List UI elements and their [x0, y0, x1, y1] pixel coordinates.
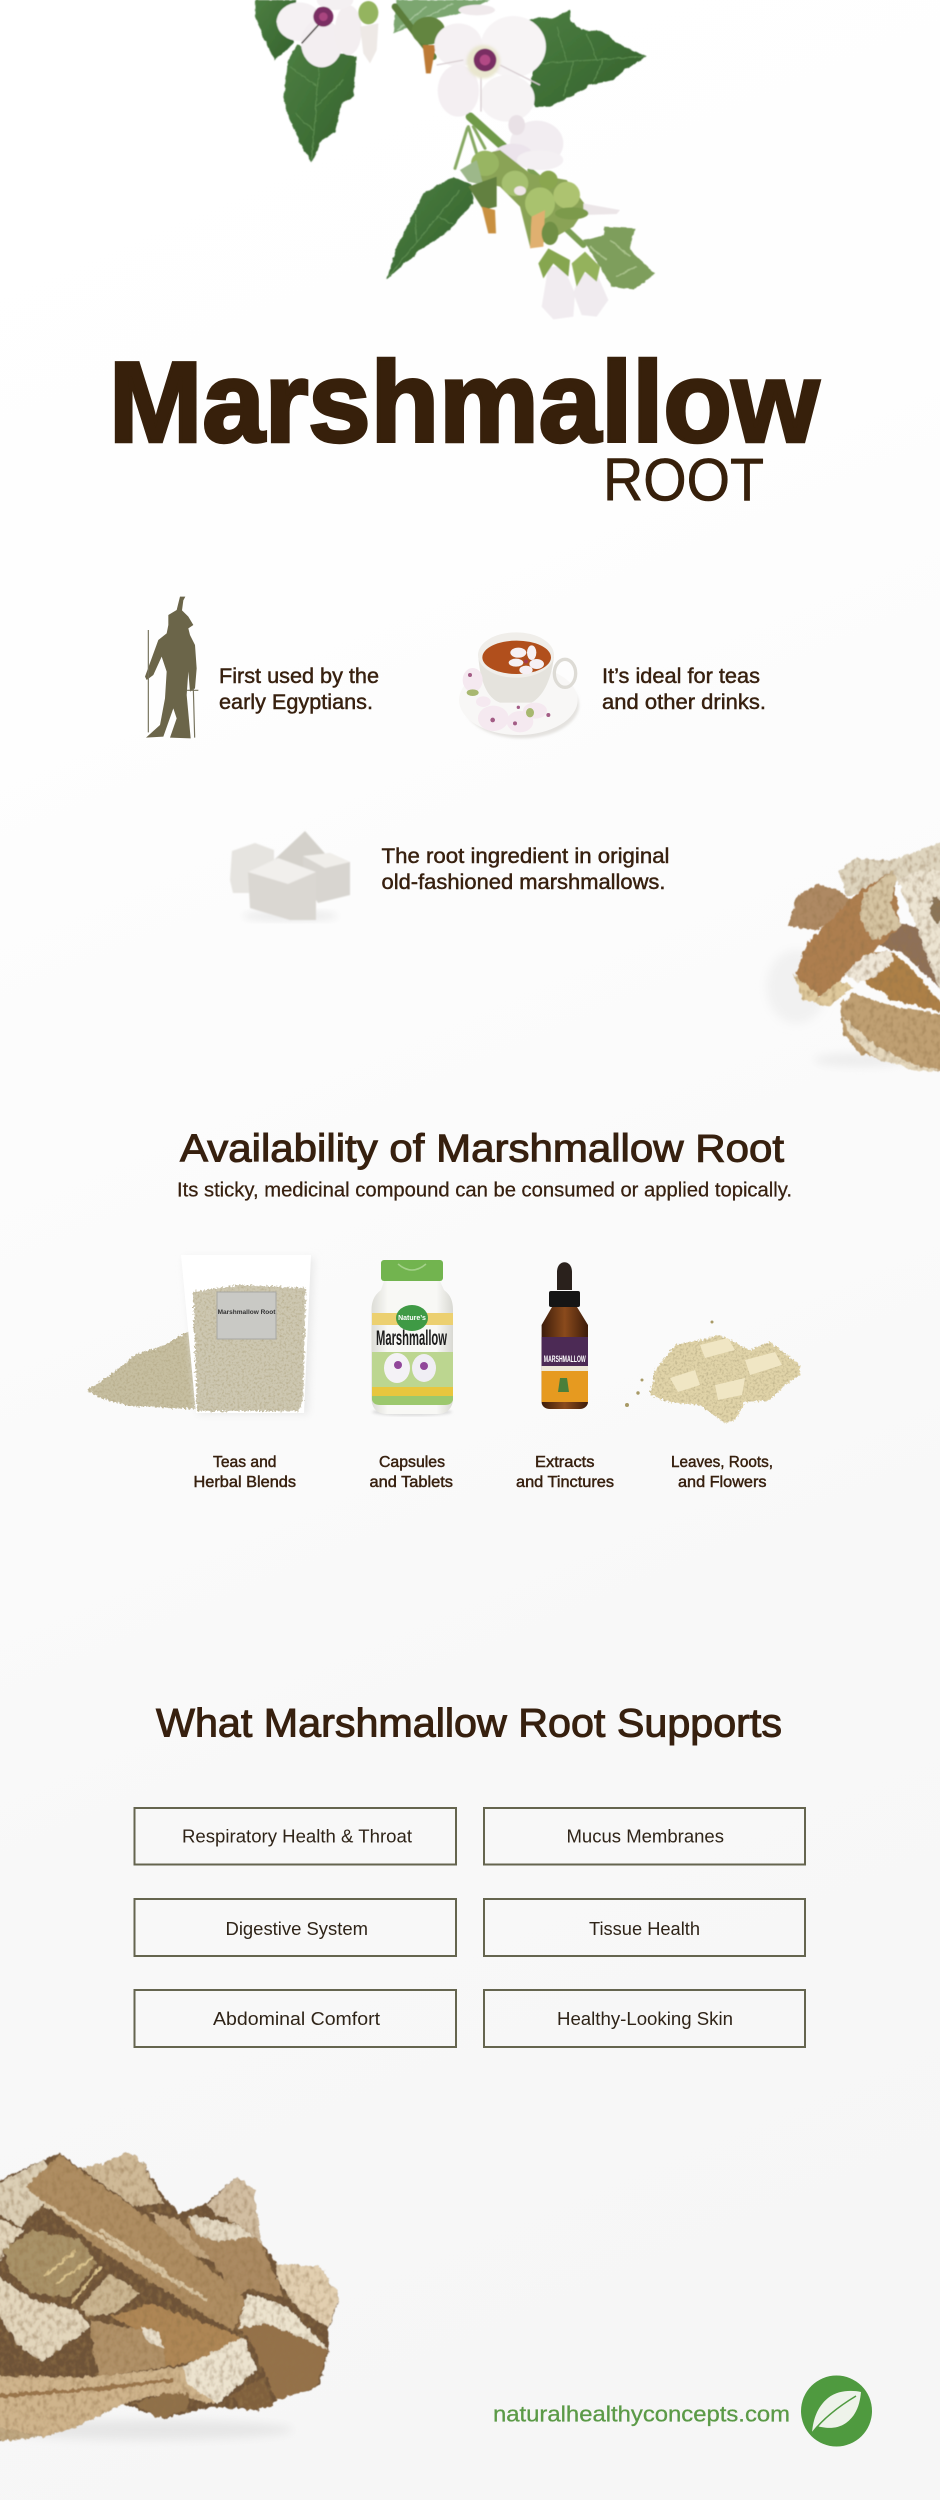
caption: extracts: and Tinctures — [516, 1474, 614, 1491]
text: first used: First used by the — [219, 665, 379, 688]
icon: green leaf logo — [801, 2376, 872, 2446]
illustration: dried root pile right — [767, 842, 940, 1072]
caption: extracts: Extracts — [535, 1454, 594, 1471]
caption: teas: Teas and — [213, 1454, 276, 1471]
fact: original marshmallows — [230, 831, 670, 922]
flower buds: green cluster — [460, 150, 620, 248]
caption: capsules: and Tablets — [370, 1474, 453, 1491]
benefit box: tissue: Tissue Health — [589, 1919, 700, 1939]
product: leaves roots and flowers — [625, 1320, 800, 1491]
fact: first used by Egyptians — [145, 597, 379, 738]
benefit box: mucus: Mucus Membranes — [566, 1826, 724, 1846]
leaf: top middle — [393, 0, 490, 33]
text: ideal for teas: It’s ideal for teas — [602, 665, 760, 688]
stems — [395, 7, 583, 245]
benefit box: digestive: Digestive System — [226, 1919, 368, 1939]
footer: website url: naturalhealthyconcepts.com — [493, 2402, 790, 2426]
icon: Egyptian figure silhouette — [145, 597, 198, 738]
heading: availability: Availability of Marshmallow Root — [180, 1128, 784, 1170]
text: original marshmallows: The root ingredient in original — [382, 845, 670, 868]
product: extracts and tinctures — [516, 1262, 614, 1491]
benefit box: respiratory — [134, 1808, 456, 1864]
benefit box: respiratory: Respiratory Health & Throat — [182, 1826, 412, 1846]
caption: leaves: Leaves, Roots, — [671, 1454, 773, 1471]
flower bud: left — [358, 1, 378, 63]
caption: capsules: Capsules — [379, 1454, 445, 1471]
product: capsules and tablets — [370, 1260, 453, 1491]
image: dried root flakes — [625, 1320, 800, 1423]
icon: tea cup with flowers — [459, 632, 579, 738]
benefit box: skin: Healthy-Looking Skin — [557, 2009, 733, 2029]
illustration: dried root pile bottom left — [0, 2152, 340, 2442]
flower: upper left — [277, 0, 362, 67]
text: original marshmallows: old-fashioned marshmallows. — [382, 871, 666, 894]
leaf: upper left — [255, 0, 297, 61]
subheading: availability description: Its sticky, medicinal compound can be consumed or applied topically. — [177, 1180, 792, 1202]
caption: leaves: and Flowers — [678, 1474, 766, 1491]
heading: supports: What Marshmallow Root Supports — [156, 1702, 782, 1746]
image: herb bag — [181, 1255, 314, 1414]
flower buds: hanging white pair — [538, 248, 608, 319]
title: Marshmallow: Marshmallow — [109, 340, 819, 466]
flower: lower half open — [494, 115, 563, 170]
product: teas and herbal blends — [87, 1255, 314, 1491]
sepal bud: middle with orange tip — [412, 17, 445, 73]
benefit box: abdominal — [134, 1990, 456, 2047]
benefit box: mucus — [484, 1808, 805, 1864]
caption: teas: Herbal Blends — [194, 1474, 296, 1491]
image: capsule bottle: Nature’s — [398, 1315, 426, 1322]
subtitle: ROOT: ROOT — [603, 446, 764, 514]
image: loose herb pile — [87, 1330, 196, 1409]
image: herb bag: Marshmallow Root — [218, 1309, 276, 1316]
benefit box: skin — [484, 1990, 805, 2047]
image: capsule bottle — [372, 1260, 453, 1416]
leaf cluster: crinkled right — [583, 227, 655, 290]
image: dropper bottle: MARSHMALLOW — [544, 1354, 586, 1364]
leaf: left hanging — [283, 45, 357, 162]
illustration: marshmallow plant flowers and leaves — [255, 0, 655, 319]
benefit box: digestive — [134, 1899, 456, 1956]
benefit box: tissue — [484, 1899, 805, 1956]
image: capsule bottle: Marshmallow — [376, 1327, 447, 1350]
benefit box: abdominal: Abdominal Comfort — [213, 2009, 380, 2029]
flower: main — [434, 5, 546, 122]
leaf: lower — [387, 177, 473, 279]
text: ideal for teas: and other drinks. — [602, 691, 766, 714]
icon: marshmallow cubes — [230, 831, 350, 922]
fact: ideal for teas — [459, 632, 766, 738]
leaf: large right — [522, 9, 647, 107]
image: dropper bottle — [542, 1262, 588, 1409]
text: first used: early Egyptians. — [219, 691, 373, 714]
